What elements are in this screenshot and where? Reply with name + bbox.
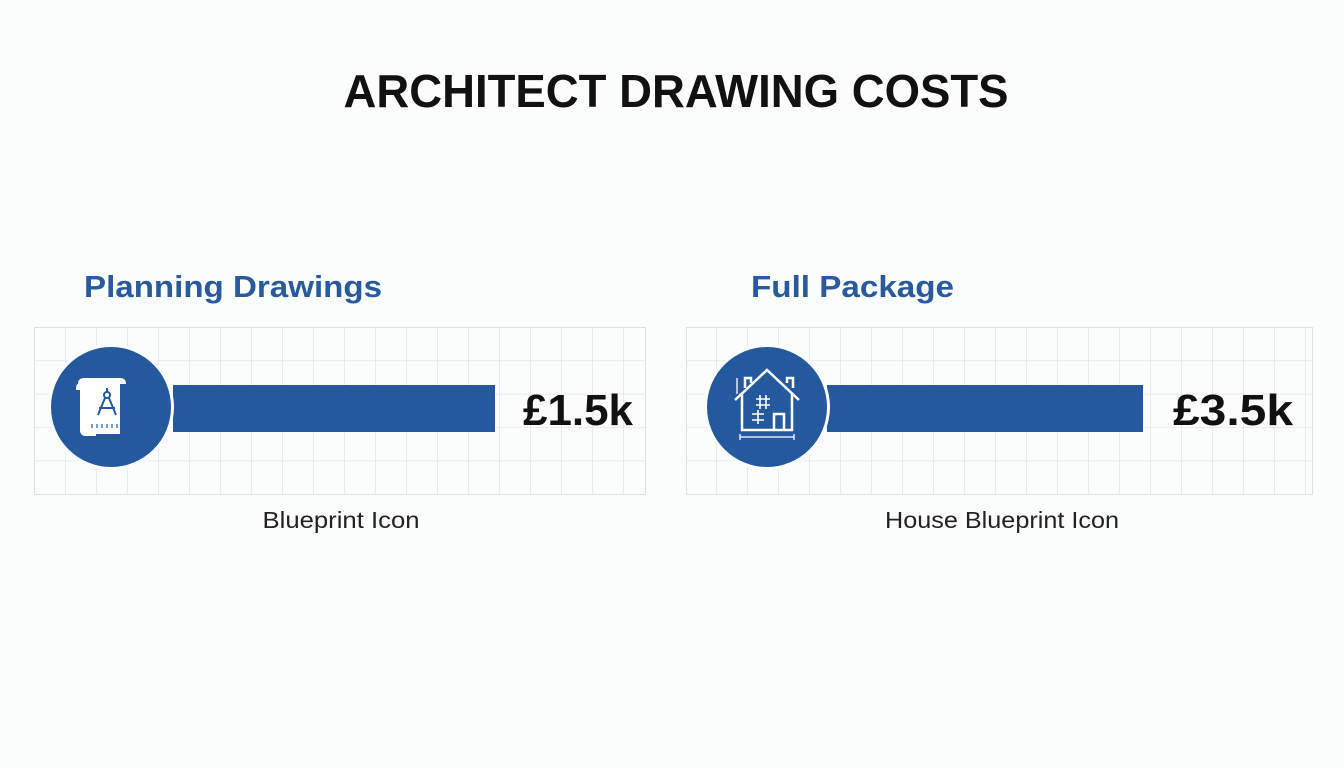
- bar: planning: [173, 385, 495, 432]
- panel: full package: [686, 269, 1312, 533]
- heading: planning drawings: Planning Drawings: [84, 269, 382, 304]
- caption: blueprint icon: Blueprint Icon: [262, 507, 420, 533]
- panel: planning drawings: [34, 269, 646, 533]
- price: planning: £1.5k: [523, 386, 634, 435]
- icon: blueprint: [48, 344, 174, 470]
- heading: full package: Full Package: [751, 269, 954, 304]
- bar: full package: [827, 385, 1143, 432]
- icon: house blueprint: [704, 344, 830, 470]
- price: full package: £3.5k: [1173, 386, 1294, 435]
- caption: house blueprint icon: House Blueprint Icon: [885, 507, 1119, 533]
- title: ARCHITECT DRAWING COSTS: [344, 65, 1008, 117]
